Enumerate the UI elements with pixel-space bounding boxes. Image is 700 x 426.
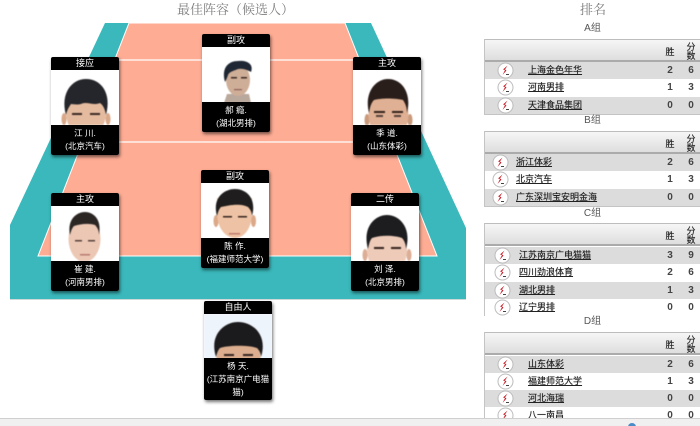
- player card: 自由人 杨天: [204, 301, 272, 400]
- player name and team: 郝 瘾.: [225, 105, 247, 115]
- row: 山东体彩: 6: [688, 358, 694, 370]
- row: 福建师范大学: 1: [667, 376, 673, 387]
- player card: 主攻 季道: [353, 57, 421, 155]
- player photo: [68, 211, 101, 261]
- player card: 接应 江川: [51, 57, 119, 155]
- position label: 接应: [76, 58, 94, 68]
- row: 河北海瑞: 0: [667, 393, 673, 404]
- player card: 副攻 陈作: [201, 170, 269, 268]
- row: 浙江体彩: 2: [667, 157, 673, 168]
- row: 天津食品集团: [485, 97, 700, 114]
- player name and team: (湖北男排): [216, 118, 256, 128]
- row: 辽宁男排: 0: [688, 302, 694, 313]
- position label: [201, 170, 269, 183]
- row: 江苏南京广电猫猫: 9: [688, 250, 694, 261]
- table header: 分: [686, 134, 696, 144]
- group C label: C组: [584, 208, 601, 219]
- row: 四川劲浪体育: 四川劲浪体育: [519, 267, 573, 277]
- player photo: [212, 188, 257, 238]
- position label: [353, 57, 421, 70]
- player name and team: [351, 261, 419, 291]
- position label: 主攻: [76, 194, 94, 204]
- row: 河北海瑞: [485, 390, 700, 407]
- row: 天津食品集团: 0: [688, 100, 694, 111]
- row: 四川劲浪体育: 2: [667, 267, 673, 278]
- position label: 副攻: [227, 35, 245, 45]
- table header: 分: [686, 42, 696, 52]
- player photo: [364, 78, 414, 125]
- player name and team: 季 道.: [376, 128, 398, 138]
- player name and team: (山东体彩): [367, 141, 407, 151]
- table header: [485, 131, 700, 154]
- row: 河南男排: [498, 80, 694, 96]
- row: 浙江体彩: 6: [688, 157, 694, 168]
- row: 山东体彩: 2: [667, 358, 673, 370]
- row: 江苏南京广电猫猫: 3: [667, 250, 673, 261]
- row: 湖北男排: 3: [688, 285, 694, 296]
- row: 广东深圳宝安明金海: 0: [667, 192, 673, 203]
- title: best lineup: 最佳阵容（候选人）: [177, 2, 294, 17]
- row: 天津食品集团: 天津食品集团: [528, 100, 582, 110]
- table header: 数: [686, 51, 696, 61]
- table header: 数: [686, 143, 696, 153]
- group D label: D组: [584, 316, 601, 327]
- position label: 主攻: [378, 58, 396, 68]
- table header: 胜: [665, 47, 674, 57]
- row: 辽宁男排: 0: [667, 302, 673, 313]
- row: 浙江体彩: 浙江体彩: [516, 157, 552, 167]
- position label: [204, 301, 272, 314]
- table header: 分: [686, 335, 696, 345]
- table header: 数: [686, 235, 696, 245]
- table header: 胜: [665, 231, 674, 241]
- row: 北京汽车: [492, 172, 694, 188]
- player name and team: [204, 358, 272, 400]
- row: 广东深圳宝安明金海: 广东深圳宝安明金海: [516, 192, 597, 202]
- row: 河南男排: 河南男排: [528, 82, 564, 92]
- table: group B: [484, 131, 700, 207]
- player name and team: 陈 作.: [224, 241, 246, 251]
- row: 山东体彩: 山东体彩: [528, 358, 564, 368]
- row: 四川劲浪体育: 6: [688, 267, 694, 278]
- position label: [351, 193, 419, 206]
- row: 广东深圳宝安明金海: 0: [688, 192, 694, 203]
- row: 湖北男排: 湖北男排: [519, 285, 555, 295]
- player name and team: (北京男排): [365, 277, 405, 287]
- volleyball court: [10, 23, 466, 300]
- player photo: [204, 314, 272, 358]
- player name and team: [353, 125, 421, 155]
- row: 福建师范大学: 3: [688, 376, 694, 387]
- row: 河北海瑞: 0: [688, 393, 694, 404]
- row: 上海金色年华: 2: [667, 65, 673, 76]
- position label: 自由人: [224, 302, 252, 312]
- row: 上海金色年华: 6: [688, 65, 694, 76]
- row: 辽宁男排: [494, 300, 694, 316]
- row: 福建师范大学: 福建师范大学: [528, 376, 582, 386]
- player name and team: 崔 建.: [74, 264, 96, 274]
- bottom browser bar: [0, 418, 700, 426]
- position label: [51, 193, 119, 206]
- player photo: [223, 60, 252, 102]
- player photo: [362, 214, 412, 261]
- table header: [485, 332, 700, 355]
- row: 辽宁男排: 辽宁男排: [519, 302, 555, 312]
- player name and team: [51, 125, 119, 155]
- player name and team: 猫): [232, 387, 244, 397]
- player name and team: (江苏南京广电猫: [207, 374, 269, 384]
- table header: 胜: [665, 340, 674, 350]
- row: 河北海瑞: 河北海瑞: [528, 393, 564, 403]
- row: 山东体彩: [485, 356, 700, 373]
- table header: 数: [686, 344, 696, 354]
- row: 八一南昌: [498, 408, 694, 418]
- row: 江苏南京广电猫猫: 江苏南京广电猫猫: [519, 250, 591, 260]
- row: 湖北男排: 1: [667, 285, 673, 296]
- icon: blue dot: [628, 423, 636, 426]
- row: 天津食品集团: 0: [667, 100, 673, 111]
- player card: 二传 刘泽: [351, 193, 419, 291]
- row: 福建师范大学: [498, 374, 694, 390]
- row: 湖北男排: [485, 282, 700, 299]
- row: 广东深圳宝安明金海: [485, 189, 700, 206]
- group A label: A组: [584, 23, 601, 34]
- player name and team: [202, 102, 270, 132]
- position label: [51, 57, 119, 70]
- player name and team: [51, 261, 119, 291]
- row: 江苏南京广电猫猫: [485, 247, 700, 264]
- row: 上海金色年华: [485, 62, 700, 79]
- position label: [202, 34, 270, 47]
- row: 北京汽车: 北京汽车: [516, 174, 552, 184]
- player name and team: (北京汽车): [65, 141, 105, 151]
- row: 河南男排: 1: [667, 82, 673, 93]
- player name and team: (福建师范大学): [207, 254, 263, 264]
- player name and team: 江 川.: [74, 128, 96, 138]
- row: 北京汽车: 1: [667, 174, 673, 185]
- position label: 二传: [376, 194, 394, 204]
- player card: 主攻 崔建: [51, 193, 119, 291]
- table: group D: [484, 332, 700, 418]
- table header: 胜: [665, 139, 674, 149]
- table header: [485, 223, 700, 246]
- player card: 副攻 郝瘾: [202, 34, 270, 132]
- row: 四川劲浪体育: [494, 264, 694, 280]
- table: group C: [484, 223, 700, 316]
- row: 河南男排: 3: [688, 82, 694, 93]
- player name and team: [201, 238, 269, 268]
- row: 浙江体彩: [485, 154, 700, 171]
- table header: 分: [686, 226, 696, 236]
- row: 上海金色年华: 上海金色年华: [528, 65, 582, 75]
- player name and team: 杨 天.: [227, 361, 249, 371]
- table: group A: [484, 39, 700, 115]
- title: ranking: 排名: [580, 2, 606, 17]
- group B label: B组: [584, 115, 601, 126]
- player name and team: (河南男排): [65, 277, 105, 287]
- table header: [485, 39, 700, 62]
- row: 北京汽车: 3: [688, 174, 694, 185]
- player name and team: 刘 泽.: [374, 264, 396, 274]
- position label: 副攻: [226, 171, 244, 181]
- player photo: [60, 78, 112, 125]
